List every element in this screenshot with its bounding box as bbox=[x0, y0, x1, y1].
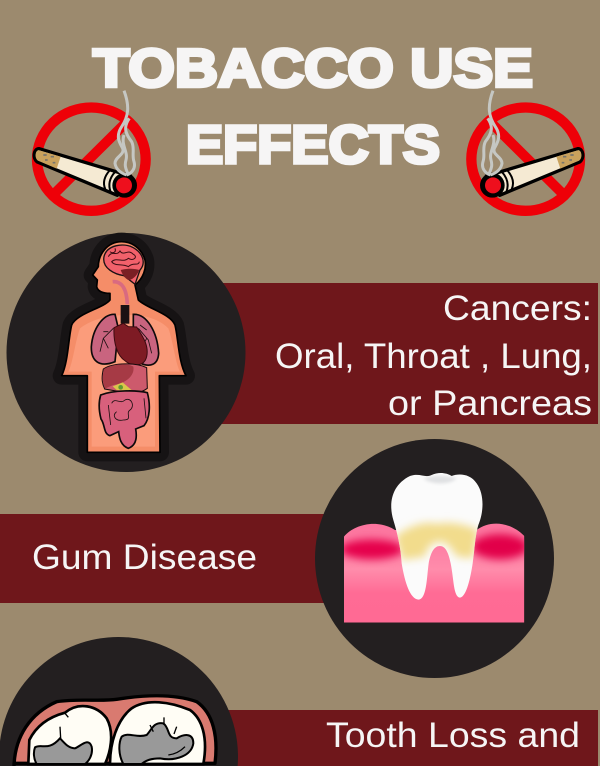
title: EFFECTS bbox=[186, 115, 440, 175]
tooth stain bbox=[395, 476, 478, 560]
heart bbox=[114, 323, 147, 365]
throat bbox=[113, 282, 127, 304]
intestine folds bbox=[108, 398, 146, 425]
banner: tooth loss: Tooth Loss and bbox=[326, 716, 580, 755]
body silhouette bbox=[62, 242, 186, 452]
brain bbox=[104, 245, 143, 284]
left tooth bbox=[28, 706, 111, 764]
right tooth decay bbox=[119, 723, 193, 764]
left tooth decay bbox=[34, 738, 92, 764]
banner: cancers: Oral, Throat , Lung, bbox=[275, 337, 592, 376]
banner: cancers: Cancers: bbox=[443, 289, 592, 328]
body halo bbox=[62, 242, 186, 452]
circle: tooth icon bbox=[315, 439, 554, 678]
icon: no smoking left bbox=[34, 91, 146, 211]
tooth grooves bbox=[60, 713, 185, 755]
cerebellum bbox=[121, 269, 139, 280]
tooth crown shade bbox=[423, 476, 457, 483]
pancreas bbox=[113, 382, 133, 391]
gum bbox=[344, 524, 524, 622]
trachea bbox=[121, 305, 129, 324]
banner: tooth loss bbox=[200, 710, 598, 766]
tooth bbox=[391, 473, 482, 600]
circle: teeth icon bbox=[0, 637, 238, 766]
lungs bbox=[91, 314, 159, 365]
banner: cancers: or Pancreas bbox=[388, 384, 592, 423]
title bbox=[93, 38, 533, 175]
circle: anatomy icon bbox=[6, 233, 246, 472]
banner: cancers bbox=[200, 283, 598, 424]
brain folds bbox=[108, 248, 139, 267]
banner: gum disease bbox=[0, 514, 340, 603]
intestines bbox=[99, 391, 149, 448]
banner: gum disease: Gum Disease bbox=[32, 538, 257, 577]
title: TOBACCO USE bbox=[93, 38, 533, 98]
liver and stomach bbox=[102, 364, 147, 393]
icon: no smoking right bbox=[471, 91, 583, 211]
lung veins bbox=[100, 325, 152, 353]
right tooth bbox=[110, 702, 205, 764]
body inner highlight bbox=[68, 315, 180, 447]
gum outline bbox=[14, 696, 216, 766]
